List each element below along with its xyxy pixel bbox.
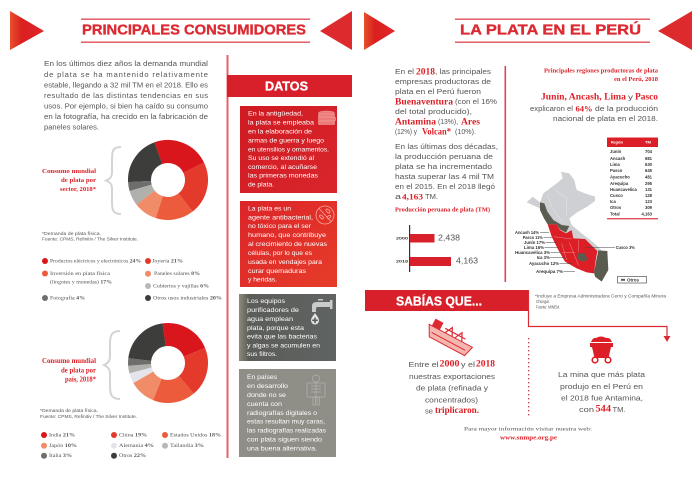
bar chart: producción: 4,163	[456, 256, 479, 266]
map labels: Cusco 3%	[616, 245, 635, 250]
map legend	[618, 276, 646, 283]
card: antigüedad: Su uso se extendió al	[248, 155, 314, 162]
table: regiones: 309	[645, 205, 653, 210]
source note: country	[40, 408, 137, 419]
table: regiones: Arequipa	[610, 181, 629, 186]
icon: cargo ship	[424, 317, 476, 357]
card: radiografías: radiografías digitales o	[247, 410, 317, 417]
card: agua: sus filtros.	[247, 351, 277, 358]
heading: la plata en el perú: LA PLATA EN EL PERÚ	[460, 20, 641, 38]
donut chart: country	[128, 323, 208, 403]
legend: country: China 19%	[119, 432, 147, 438]
card: antigüedad: comercio, al acuñarse	[248, 164, 317, 171]
table: regiones: Junín	[610, 149, 622, 154]
table: regiones: Pasco	[610, 168, 623, 173]
heading: sabías que	[365, 290, 528, 311]
card: antibacterial	[240, 201, 337, 287]
text block: principales empresas	[395, 67, 497, 137]
legend: sector	[42, 258, 222, 301]
card: agua: y algas se acumulen en	[247, 342, 320, 350]
card: agua: plata, porque esta	[247, 325, 304, 332]
icon: left page triangle	[10, 11, 44, 50]
text block: producción peruana	[395, 142, 498, 202]
card: antigüedad	[240, 106, 337, 193]
card: antibacterial: humano, que contribuye	[248, 232, 326, 239]
donut chart: sector	[128, 140, 208, 220]
card: antibacterial: usada en vendajes para	[248, 259, 322, 266]
card: radiografías: en desarrollo	[247, 383, 288, 390]
text block: producción peruana: En las últimas dos décadas,	[395, 142, 498, 151]
legend: sector: Cubiertos y vajillas 6%	[153, 284, 209, 290]
text block: intro demand: usos. Por ejemplo, si bien ha caído su consumo	[44, 102, 208, 110]
card: agua: evita que las bacterias	[247, 334, 317, 340]
source note: country: Fuente: CPMS, Refinitiv / The Silver Institute.	[40, 414, 137, 419]
text block: principales empresas: (con el 16%	[455, 97, 497, 106]
card: antibacterial: curar quemaduras	[248, 268, 306, 275]
text block: producción peruana: plata se ha incrementado	[395, 162, 492, 171]
card: antibacterial: agente antibacterial,	[248, 214, 313, 222]
table: regiones: Ancash	[610, 156, 626, 161]
table: regiones: 128	[645, 193, 653, 198]
table: regiones: 131	[645, 187, 653, 192]
text block: principales empresas: , las principales	[435, 67, 491, 76]
table: regiones: TM	[645, 140, 651, 144]
card: agua: Los equipos	[247, 298, 285, 305]
table: regiones: Ayacucho	[610, 174, 630, 180]
legend: country: Italia 3%	[49, 453, 72, 459]
legend: country: Japón 10%	[49, 443, 77, 449]
icon: faucet and drop	[311, 299, 332, 324]
heading: sabías que: SABÍAS QUE...	[396, 294, 482, 308]
table: regiones: Otros	[610, 205, 622, 210]
map labels: Pasco 11%	[523, 235, 543, 240]
card: agua: purificadores de	[247, 307, 299, 314]
footer: web: www.snmpe.org.pe	[500, 436, 558, 442]
legend: sector: Paneles solares 8%	[154, 271, 200, 277]
text block: antamina: con	[579, 405, 594, 414]
text block: principales empresas: (12%) y	[395, 127, 417, 136]
legend: country: Alemania 4%	[119, 443, 154, 449]
text block: junín ancash lima pasco: y	[628, 92, 633, 102]
bar chart: producción	[396, 225, 479, 272]
card: radiografías	[239, 369, 336, 457]
legend: country	[41, 432, 221, 459]
legend: sector: Joyería 21%	[152, 258, 183, 264]
icon: brace country	[104, 331, 120, 399]
source note: empresas: Chungar.	[536, 299, 550, 304]
text block: exportaciones: y el	[461, 360, 475, 369]
map labels	[515, 230, 635, 274]
card: radiografías: En países	[247, 374, 277, 381]
table: regiones	[607, 138, 658, 219]
text block: principales empresas: 2018	[416, 67, 436, 77]
map labels: Lima 16%	[524, 245, 544, 250]
table: regiones: 645	[645, 168, 653, 173]
icon: coins	[318, 111, 336, 124]
source note: country: *Demanda de plata física.	[40, 408, 98, 413]
text block: exportaciones	[408, 359, 495, 416]
card: antigüedad: la plata se empleaba	[248, 120, 314, 126]
chart label: consumo por país	[42, 357, 96, 384]
icon: brace sector	[106, 147, 121, 214]
legend: sector: Inversión en plata física	[50, 270, 111, 277]
text block: principales empresas: plata en el Perú fueron	[395, 87, 481, 96]
text block: intro demand: resultado de las distintas tendencias en sus	[44, 91, 208, 100]
card: antigüedad: armas de guerra y luego	[248, 138, 324, 144]
text block: exportaciones: de plata (refinada y	[416, 384, 488, 392]
map labels: Ancash 14%	[515, 230, 539, 235]
text block: principales empresas: Buenaventura	[395, 97, 454, 107]
text block: exportaciones: 2018	[476, 359, 495, 369]
bar chart: producción: 2,438	[438, 234, 461, 242]
text block: junín ancash lima pasco: de la producción	[595, 104, 658, 113]
source note: sector: Fuente: CPMS, Refinitiv / The Silver Institute.	[42, 236, 138, 242]
heading: principales consumidores: PRINCIPALES CONSUMIDORES	[82, 22, 306, 38]
legend: country: India 21%	[49, 432, 75, 438]
map labels: Junín 17%	[524, 240, 545, 245]
text block: intro demand: de plata se ha mantenido relativamente	[44, 70, 208, 79]
legend: country: Estados Unidos 18%	[170, 432, 221, 438]
text block: junín ancash lima pasco	[530, 92, 658, 123]
text block: principales empresas: (10%).	[455, 127, 476, 136]
text block: junín ancash lima pasco: Junín, Ancash, Lima	[541, 92, 626, 102]
footer: web	[464, 426, 593, 442]
card: agua	[239, 294, 336, 361]
footer: web: Para mayor información visitar nuestra web:	[464, 426, 593, 433]
text block: antamina: el 2018 fue Antamina,	[561, 394, 643, 402]
table: regiones: 295	[645, 181, 653, 186]
table: regiones: 681	[645, 156, 653, 161]
text block: antamina: La mina que más plata	[558, 370, 646, 379]
table: regiones: 123	[645, 199, 653, 204]
icon: far right triangle	[658, 11, 692, 50]
card: agua: agua emplean	[247, 316, 293, 323]
chart label: consumo por país: de plata por	[61, 366, 96, 374]
card: radiografías: cuenta con	[247, 401, 282, 408]
table: regiones: 481	[645, 174, 653, 180]
text block: junín ancash lima pasco: explicaron el	[530, 104, 573, 113]
text block: intro demand: en la fotografía, ha crecido en la fabricación de	[44, 112, 208, 121]
card: antigüedad: En la antigüedad,	[248, 110, 303, 118]
text block: producción peruana: TM.	[425, 192, 438, 201]
text block: intro demand: estable, llegando a 32 mil TM en el 2018. Ello es	[44, 80, 208, 89]
map labels: Ica 3%	[537, 255, 550, 260]
source note: empresas: *Incluye a Empresa Administradora Cerro y Compañía Minera	[535, 294, 667, 298]
table: regiones: Región	[611, 140, 624, 144]
card: antigüedad: las primeras monedas	[248, 172, 318, 180]
table: regiones: 4,163	[642, 212, 653, 216]
card: antibacterial: y heridas.	[248, 276, 277, 284]
map labels: Arequipa 7%	[536, 269, 563, 274]
chart label: consumo por país: Consumo mundial	[42, 357, 96, 365]
icon: mine cart	[590, 336, 613, 363]
text block: intro demand: paneles solares.	[44, 123, 99, 132]
arrow: sabías que connector	[528, 290, 670, 342]
text block: antamina: TM.	[612, 405, 626, 414]
text block: intro demand	[44, 59, 208, 132]
heading: regiones productoras	[544, 68, 658, 83]
text block: junín ancash lima pasco: Pasco	[635, 92, 658, 102]
legend: country: Otros 22%	[119, 453, 146, 459]
text block: principales empresas: Antamina	[395, 117, 437, 127]
heading: datos: DATOS	[265, 80, 308, 94]
text block: producción peruana: a	[395, 192, 402, 201]
table: regiones: 704	[645, 149, 653, 154]
source note: empresas: Fuente: MINEM.	[536, 305, 560, 310]
chart label: consumo por país: país, 2018*	[65, 376, 96, 384]
card: antigüedad: de plata.	[248, 182, 274, 188]
text block: principales empresas: En el	[395, 67, 414, 76]
legend: sector: (lingotes y monedas) 17%	[50, 278, 112, 285]
card: antibacterial: células, por lo que es	[248, 250, 312, 257]
text block: exportaciones: concentrados)	[425, 396, 479, 404]
text block: exportaciones: nuestras exportaciones	[409, 372, 495, 381]
text block: principales empresas: (13%),	[438, 117, 458, 126]
heading: regiones productoras: en el Perú, 2018	[614, 77, 658, 83]
text block: producción peruana: la producción peruana de	[395, 152, 493, 161]
card: antigüedad: en la elaboración de	[248, 128, 312, 136]
chart label: consumo por sector: de plata por	[61, 177, 96, 184]
text block: producción peruana: hasta superar las 4 mil TM	[395, 172, 494, 181]
text block: producción peruana: 4,163	[402, 192, 423, 202]
legend: sector: Fotografía 4%	[50, 294, 85, 301]
heading: datos	[227, 75, 352, 97]
table: regiones: Ica	[610, 199, 616, 204]
text block: intro demand: En los últimos diez años la demanda mundial	[44, 59, 208, 68]
card: antibacterial: La plata es un	[248, 206, 291, 212]
bar chart: producción: 2000	[396, 236, 408, 240]
map labels: Huancavelica 3%	[515, 250, 550, 255]
source note: sector: *Demanda de plata física.	[42, 231, 101, 236]
text block: exportaciones: Entre el	[408, 360, 439, 369]
panel: datos	[226, 55, 352, 458]
legend: country: Tailandia 3%	[170, 443, 204, 449]
text block: principales empresas: del total producido),	[395, 107, 472, 116]
map labels: Ayacucho 12%	[529, 261, 559, 266]
table: regiones: Huancavelica	[610, 187, 637, 192]
chart label: consumo por sector	[42, 168, 97, 193]
chart label: consumo por sector: sector, 2018*	[60, 186, 97, 193]
text block: exportaciones: 2000	[440, 359, 460, 369]
table: regiones: Total	[610, 212, 620, 216]
bar chart: producción: 2018	[396, 260, 408, 264]
table: regiones: 630	[645, 162, 653, 167]
chart label: consumo por sector: Consumo mundial	[42, 168, 96, 175]
card: radiografías: una buena alternativa.	[247, 446, 317, 452]
chart title: producción peruana: Producción peruana de plata (TM)	[395, 207, 490, 214]
card: antibacterial: no tóxico para el ser	[248, 223, 312, 230]
text block: producción peruana: en el 2015. En el 2018 llegó	[395, 182, 495, 191]
text block: principales empresas: empresas productoras de	[395, 77, 491, 86]
legend: sector: Productos eléctricos y electrónicos 24%	[50, 258, 141, 264]
source note: sector	[42, 231, 138, 242]
text block: junín ancash lima pasco: nacional de plata en el 2018.	[553, 114, 658, 123]
table: regiones: Cusco	[610, 193, 623, 198]
map legend: Otros	[627, 277, 640, 282]
heading: regiones productoras: Principales regiones productoras de plata	[544, 68, 658, 74]
text block: principales empresas: Ares	[461, 117, 481, 127]
text block: exportaciones: triplicaron.	[435, 406, 479, 416]
map: perú	[527, 172, 608, 282]
card: radiografías: las radiografías realizadas	[247, 428, 326, 434]
text block: junín ancash lima pasco: 64%	[576, 104, 592, 114]
source note: empresas	[535, 294, 667, 310]
icon: bacteria prohibited	[316, 206, 334, 224]
text block: antamina: 544	[596, 405, 611, 415]
table: regiones: Lima	[610, 162, 620, 167]
card: antibacterial: al crecimiento de nuevas	[248, 241, 327, 248]
text block: exportaciones: se	[425, 406, 433, 416]
icon: centre left triangle	[320, 11, 352, 50]
icon: centre right triangle	[364, 12, 395, 50]
text block: principales empresas: Volcan*	[422, 127, 451, 137]
card: radiografías: donde no se	[247, 392, 286, 399]
text block: antamina	[558, 370, 646, 415]
card: radiografías: estas resultan muy caras,	[247, 418, 325, 426]
icon: x-ray skeleton	[307, 375, 325, 405]
legend: sector: Otros usos industriales 20%	[153, 295, 222, 301]
card: radiografías: con plata siguen siendo	[247, 436, 322, 444]
card: antigüedad: en utensilios y ornamentos.	[248, 146, 329, 154]
text block: antamina: produjo en el Perú en	[560, 382, 643, 391]
